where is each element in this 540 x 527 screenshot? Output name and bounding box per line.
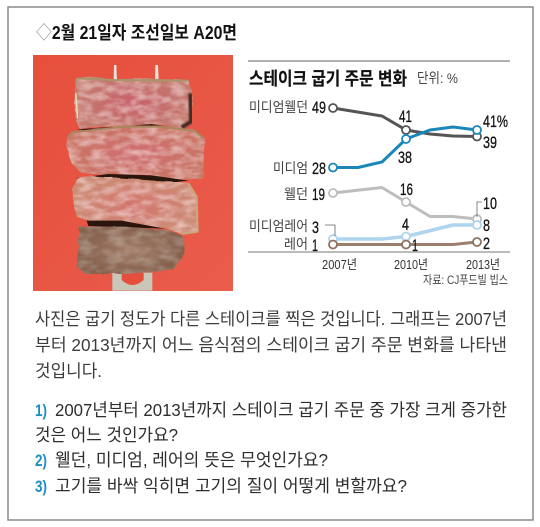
value labels: 19 — [312, 185, 325, 204]
value labels: 2 — [483, 234, 490, 253]
icon: fork handle — [112, 273, 152, 291]
question 1: 1) — [35, 401, 47, 420]
description text block: 사진은 굽기 정도가 다른 스테이크를 찍은 것입니다. 그래프는 2007년 — [35, 309, 507, 329]
value labels: 3 — [312, 218, 319, 237]
question 1: 것은 어느 것인가요? — [35, 425, 178, 445]
chart title: 스테이크 굽기 주문 변화 — [249, 69, 407, 89]
question 2: 웰던, 미디엄, 레어의 뜻은 무엇인가요? — [55, 450, 328, 470]
series: medium rare — [329, 221, 481, 243]
question 1: 2007년부터 2013년까지 스테이크 굽기 주문 중 가장 크게 증가한 — [55, 400, 507, 420]
series labels: 미디엄레어 — [249, 218, 308, 234]
question 1 — [35, 400, 507, 445]
x-axis years: 2010년 — [394, 257, 428, 272]
steak slice 3 — [72, 174, 198, 234]
leader line: value 10 — [477, 202, 482, 217]
value labels: 10 — [483, 194, 497, 213]
steak slice 1 — [74, 77, 193, 132]
value labels: 28 — [312, 159, 326, 178]
series: rare — [329, 238, 481, 248]
photo: steak on a fork — [33, 55, 233, 291]
series: medium — [329, 126, 481, 172]
series: well done — [329, 188, 481, 223]
series: medium well — [329, 104, 481, 140]
series labels: 레어 — [284, 236, 308, 252]
chart top rule — [248, 60, 510, 62]
value labels: 8 — [483, 216, 490, 235]
series labels: 미디엄웰던 — [249, 99, 308, 115]
series labels — [249, 99, 308, 252]
description text block: 것입니다. — [35, 361, 102, 381]
value labels: 1 — [412, 236, 418, 255]
questions text block — [35, 400, 507, 496]
series labels: 웰던 — [284, 186, 308, 202]
value labels: 1 — [312, 236, 318, 255]
x-axis years: 2013년 — [466, 257, 500, 272]
series labels: 미디엄 — [273, 160, 308, 176]
value labels: 49 — [312, 98, 326, 117]
icon: fork tines — [114, 65, 159, 81]
heading: source line: ◇2월 21일자 조선일보 A20면 — [36, 23, 237, 43]
chart unit: 단위: % — [417, 70, 458, 86]
steak slice 2 — [67, 126, 205, 180]
x-axis years: 2007년 — [322, 257, 357, 272]
value labels: 16 — [400, 180, 413, 199]
question 3: 고기를 바싹 익히면 고기의 질이 어떻게 변할까요? — [55, 476, 407, 496]
source note: 자료: CJ푸드빌 빕스 — [423, 273, 508, 287]
steak slice 4 — [77, 221, 184, 274]
value labels: 41% — [483, 112, 508, 131]
question 3: 3) — [35, 477, 47, 496]
leader line: value 3 — [325, 225, 335, 236]
chart baseline — [248, 251, 510, 253]
x-axis years — [322, 257, 500, 272]
value labels: 39 — [483, 133, 497, 152]
value labels — [312, 98, 508, 255]
question 2: 2) — [35, 451, 47, 470]
description text block — [35, 309, 507, 381]
line chart panel: steak order changes — [248, 61, 510, 287]
value labels: 41 — [399, 107, 412, 126]
description text block: 부터 2013년까지 어느 음식점의 스테이크 굽기 주문 변화를 나타낸 — [35, 335, 507, 355]
value labels: 4 — [402, 215, 409, 234]
value labels: 38 — [398, 148, 412, 167]
